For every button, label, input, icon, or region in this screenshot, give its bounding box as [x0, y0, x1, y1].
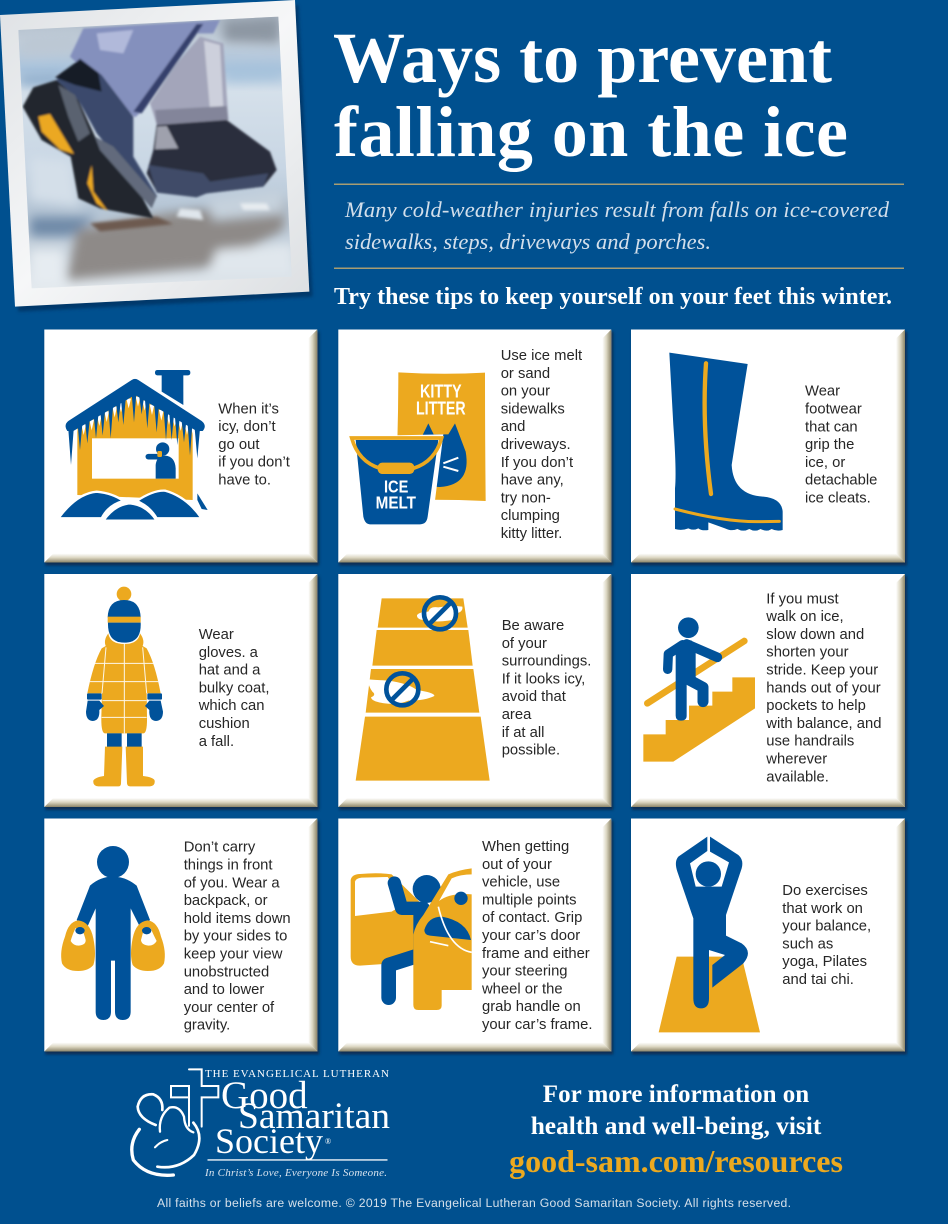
text: exiting vehicle: your car’s door — [482, 928, 580, 944]
text: exiting vehicle: frame and either — [482, 946, 590, 962]
panel: ice melt — [338, 330, 613, 566]
text: ice melt: try non- — [501, 490, 551, 506]
text: exiting vehicle: your steering — [482, 964, 568, 980]
text: surroundings: if at all — [502, 725, 544, 741]
text: footwear: that can — [805, 419, 858, 435]
logo: Good Samaritan Society: Good — [221, 1074, 308, 1117]
text: walk slowly: hands out of your — [766, 680, 881, 696]
text: footwear: ice, or — [805, 455, 845, 471]
text: carry items low: gravity. — [184, 1018, 230, 1034]
panel: exiting vehicle — [338, 818, 613, 1054]
text: warm clothing: Wear — [199, 627, 234, 643]
logo: Good Samaritan Society: Samaritan — [238, 1096, 390, 1137]
text: ice melt: clumping — [501, 508, 560, 524]
panel: warm clothing — [44, 574, 319, 810]
panel: footwear — [631, 330, 907, 566]
text: warm clothing: hat and a — [199, 663, 261, 679]
subtitle: sidewalks, steps, driveways and porches. — [345, 229, 711, 254]
text: ice melt: Use ice melt — [501, 348, 582, 364]
subtitle: Many cold-weather injuries result from falls on ice-covered — [344, 197, 890, 222]
title — [333, 18, 848, 172]
text: walk slowly: wherever — [765, 752, 827, 768]
text: footwear: footwear — [805, 402, 862, 418]
text: ice melt: driveways. — [501, 437, 571, 453]
text: warm clothing: cushion — [199, 716, 250, 732]
photo: boots walking on ice — [0, 0, 313, 312]
icon: kitty litter and ice melt: LITTER — [416, 397, 466, 418]
icon: person in winter coat — [86, 587, 163, 786]
text: surroundings: possible. — [502, 743, 560, 759]
call to action: For more information on — [543, 1081, 809, 1108]
text: exiting vehicle: your car’s frame. — [482, 1017, 592, 1033]
text: ice melt: kitty litter. — [501, 526, 562, 542]
text: carry items low: things in front — [184, 858, 273, 874]
text: walk slowly: with balance, and — [765, 716, 881, 732]
text: exiting vehicle: When getting — [482, 839, 569, 855]
text: carry items low: backpack, or — [184, 893, 268, 909]
text: carry items low: of you. Wear a — [184, 875, 280, 891]
icon: icy walkway with warning signs — [356, 597, 490, 781]
text: walk slowly: walk on ice, — [765, 609, 844, 625]
text: warm clothing: bulky coat, — [199, 680, 269, 696]
text: warm clothing: which can — [198, 698, 265, 714]
text: walk slowly: available. — [766, 769, 829, 785]
text: balance exercises: your balance, — [782, 919, 871, 935]
panel: carry items low — [44, 818, 319, 1054]
call to action — [509, 1081, 843, 1179]
text: balance exercises: and tai chi. — [782, 972, 854, 988]
logo: Good Samaritan Society: ® — [325, 1137, 331, 1146]
text: footwear: ice cleats. — [805, 490, 871, 506]
text: walk slowly: If you must — [766, 591, 839, 607]
icon: person climbing stairs with handrail — [643, 617, 755, 762]
text: balance exercises: Do exercises — [782, 883, 868, 899]
text: stay indoors: have to. — [218, 472, 271, 488]
text: exiting vehicle: of contact. Grip — [482, 910, 582, 926]
text: stay indoors: icy, don’t — [218, 419, 276, 435]
text: surroundings: area — [502, 707, 532, 723]
text: ice melt: have any, — [501, 473, 564, 489]
icon: person getting out of car — [351, 868, 472, 1010]
text: carry items low: unobstructed — [184, 964, 269, 980]
text: exiting vehicle: multiple points — [482, 892, 577, 908]
logo: Good Samaritan Society — [132, 1068, 390, 1179]
icon: kitty litter and ice melt — [351, 372, 486, 525]
icon: kitty litter and ice melt: MELT — [376, 493, 416, 513]
text: carry items low: by your sides to — [184, 929, 287, 945]
text: walk slowly: slow down and — [766, 627, 864, 643]
text: surroundings: If it looks icy, — [502, 671, 585, 687]
icon: kitty litter and ice melt: ICE — [384, 477, 408, 497]
text: stay indoors: When it’s — [218, 401, 279, 417]
text: walk slowly: pockets to help — [766, 698, 866, 714]
text: carry items low: keep your view — [184, 946, 283, 962]
text: surroundings: Be aware — [502, 618, 564, 634]
text: carry items low: hold items down — [184, 911, 291, 927]
subtitle — [344, 197, 890, 254]
logo: Good Samaritan Society: THE EVANGELICAL LUTHERAN — [205, 1068, 389, 1080]
icon: icy house — [58, 370, 208, 521]
text: balance exercises: such as — [782, 936, 833, 952]
panel: walk slowly — [631, 574, 907, 810]
logo: Good Samaritan Society: In Christ’s Love, Everyone Is Someone. — [204, 1167, 387, 1179]
text: carry items low: and to lower — [184, 982, 264, 998]
text: exiting vehicle: vehicle, use — [482, 875, 560, 891]
text: exiting vehicle: grab handle on — [482, 999, 581, 1015]
text: ice melt: on your — [501, 384, 550, 400]
text: warm clothing: a fall. — [199, 734, 234, 750]
call to action: health and well-being, visit — [531, 1112, 822, 1140]
icon: person carrying bags at sides — [61, 846, 165, 1020]
footer note: All faiths or beliefs are welcome. © 2019 The Evangelical Lutheran Good Samaritan Society. All rights reserved. — [157, 1196, 791, 1210]
text: footwear: detachable — [805, 473, 877, 489]
icon: boot — [669, 353, 783, 531]
text: balance exercises: that work on — [782, 901, 863, 917]
panel: balance exercises — [631, 818, 907, 1054]
text: stay indoors: if you don’t — [218, 455, 290, 471]
text: ice melt: or sand — [501, 366, 550, 382]
text: surroundings: of your — [502, 636, 547, 652]
title: falling on the ice — [334, 92, 848, 172]
logo: Good Samaritan Society: Society — [215, 1121, 323, 1161]
text: exiting vehicle: out of your — [482, 857, 552, 873]
text: ice melt: sidewalks — [501, 401, 565, 417]
text: walk slowly: stride. Keep your — [766, 662, 878, 678]
text: surroundings: surroundings. — [502, 654, 591, 670]
text: warm clothing: gloves. a — [199, 645, 259, 661]
text: ice melt: If you don’t — [501, 455, 573, 471]
text: footwear: Wear — [805, 384, 840, 400]
text: footwear: grip the — [805, 437, 854, 453]
intro heading: Try these tips to keep yourself on your feet this winter. — [334, 284, 892, 310]
text: walk slowly: shorten your — [766, 645, 849, 661]
text: balance exercises: yoga, Pilates — [782, 954, 867, 970]
text: stay indoors: go out — [218, 437, 259, 453]
title: Ways to prevent — [333, 18, 832, 98]
panel: stay indoors — [44, 330, 319, 566]
panel: surroundings — [338, 574, 613, 810]
icon: kitty litter and ice melt: KITTY — [420, 381, 462, 402]
text: walk slowly: use handrails — [766, 734, 854, 750]
text: carry items low: Don’t carry — [184, 840, 256, 856]
text: exiting vehicle: wheel or the — [481, 981, 563, 997]
icon: yoga tree pose on mat — [659, 837, 760, 1032]
text: carry items low: your center of — [184, 1000, 275, 1016]
text: surroundings: avoid that — [502, 689, 566, 705]
call to action: good-sam.com/resources — [509, 1143, 843, 1179]
text: ice melt: and — [501, 419, 525, 435]
